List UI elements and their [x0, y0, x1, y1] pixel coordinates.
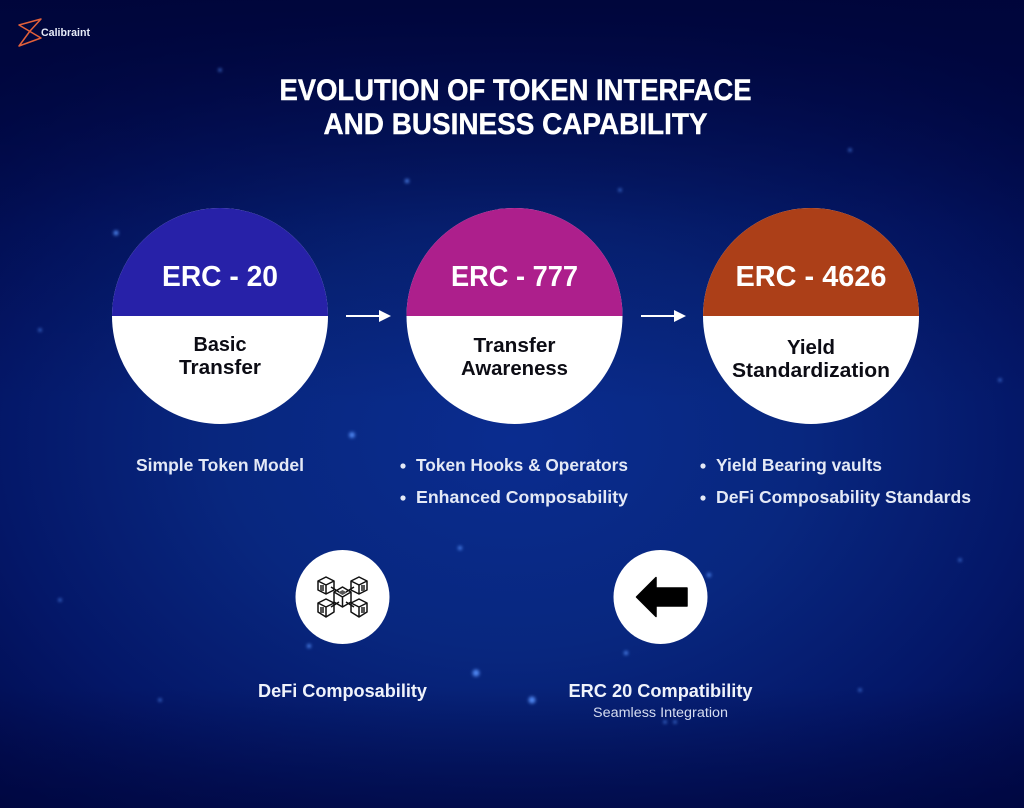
list: ERC-777 features [400, 455, 628, 507]
arrow: ERC-20 to ERC-777 [346, 310, 391, 322]
list: ERC-4626 features: DeFi Composability Standards [716, 487, 971, 507]
panel: ERC-20: Basic [194, 334, 246, 356]
panel: ERC-777: ERC - 777 [451, 261, 578, 293]
text: ERC 20 compatibility: ERC 20 Compatibility [568, 681, 752, 701]
text: simple token model: Simple Token Model [136, 455, 304, 475]
panel: ERC-4626: Standardization [732, 360, 890, 382]
title: EVOLUTION OF TOKEN INTERFACE [280, 74, 752, 107]
icon: DeFi composability cubes [296, 550, 390, 644]
text: DeFi composability: DeFi Composability [258, 681, 427, 701]
panel: ERC-4626: Yield [787, 337, 835, 359]
panel: ERC-20: ERC - 20 [162, 261, 278, 293]
title: AND BUSINESS CAPABILITY [324, 108, 708, 141]
arrow: ERC-777 to ERC-4626 [641, 310, 686, 322]
logo: Calibraint: Calibraint [41, 27, 90, 39]
panel: ERC-777: Awareness [461, 358, 568, 380]
icon: left arrow [614, 550, 708, 644]
text: ERC 20 compatibility: Seamless Integration [593, 705, 728, 720]
panel: ERC-20 [112, 208, 328, 424]
panel: ERC-20: Transfer [179, 357, 261, 379]
panel: ERC-777: Transfer [474, 335, 556, 357]
panel: ERC-4626: ERC - 4626 [736, 261, 886, 293]
panel: ERC-777 [406, 208, 623, 424]
panel: ERC-4626 [703, 208, 919, 424]
list: ERC-4626 features: Yield Bearing vaults [716, 455, 882, 475]
list: ERC-4626 features [700, 455, 971, 507]
list: ERC-777 features: Token Hooks & Operators [416, 455, 628, 475]
logo: Calibraint [19, 19, 90, 46]
list: ERC-777 features: Enhanced Composability [416, 487, 628, 507]
text: ERC 20 compatibility [568, 681, 752, 720]
title [280, 74, 752, 141]
